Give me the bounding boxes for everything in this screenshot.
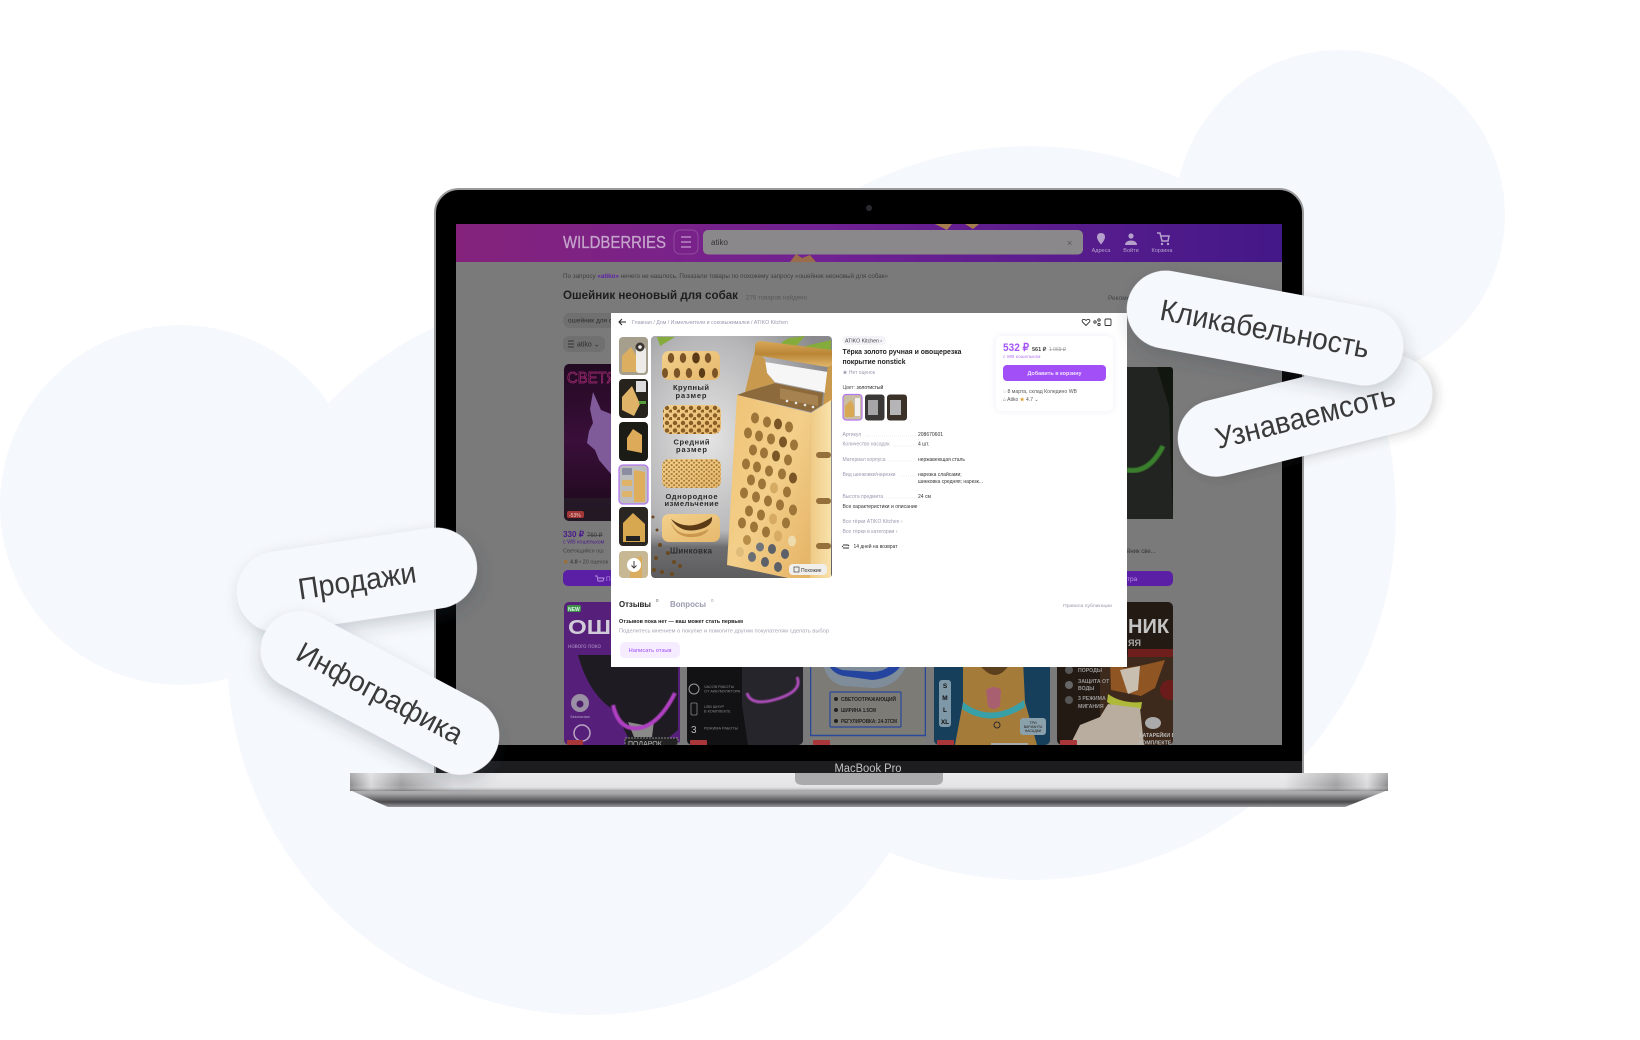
product card row 2: dark collar: 3 [691,725,697,736]
modal panel [611,313,1127,667]
breadcrumb: Главная / Дом / Измельчители и соковыжималки / ATIKO Kitchen [632,320,788,326]
reviews section: Отзывов пока нет — ваш может стать первым [619,619,743,625]
panel: small holes [662,459,721,488]
product title: Тёрка золото ручная и овощерезка [842,347,962,356]
thumbnail: grater on dark [619,422,648,461]
label: medium: размер [676,445,707,454]
reviews section: Правила публикации [1063,603,1112,609]
header icons: Адреса [1092,248,1111,254]
reviews section: Вопросы [670,600,706,609]
grater [727,341,832,578]
product card row 2: corgi: S [943,683,948,690]
product title [842,347,962,366]
product card: black dog with green collar: йник све... [1127,548,1156,555]
label: slicer: Шинковка [670,546,713,556]
product card row 2: dog with yellow collar: 3 РЕЖИМА [1078,696,1106,702]
thumbnail: grater box [619,379,648,418]
product card row 2: blue collar: РЕГУЛИРОВКА: 24-37СМ [841,719,897,725]
pill: Кликабельность: Кликабельность [1157,294,1372,365]
label: large [674,384,708,400]
pill: Инфографика [247,598,513,788]
action icons [1082,319,1111,326]
return policy [842,543,898,550]
header icons [1092,233,1173,254]
brand chip [563,336,605,352]
laptop base [350,773,1388,807]
panel: medium holes [663,405,721,434]
product card row 2: dog with yellow collar: НИК [1128,616,1170,638]
pill: Кликабельность [1120,264,1410,392]
product card: neon dog: ★ 4.8 • 20 оценок [563,560,609,566]
card price: 330 ₽ [563,529,585,539]
product card row 2: dark collar [687,667,803,745]
specification list: нарезка слайсами; [918,471,962,478]
thumbnail: partial, with scroll button [619,551,648,578]
card image: СВЕТЯ [567,370,617,387]
product card row 2: dog with yellow collar: БАТАРЕЙКИ В [1139,731,1176,739]
screen: dimmed marketplace page [456,224,1282,748]
specification list: Вид шинковки/нарезки [842,472,896,478]
thumbnail: white box and cat [619,337,648,375]
label: medium [674,439,709,454]
panel: slicer [662,514,720,542]
product card row 2: corgi: XL [941,719,949,726]
grater front [727,395,811,578]
price box: с WB кошельком [1003,354,1040,360]
specification list: Высота предмета [842,494,883,500]
product card row 2: dark collar: РЕЖИМА РАБОТЫ [704,726,739,730]
product card row 2: dog with yellow collar: МИГАНИЯ [1078,704,1104,710]
product card row 2: dog with yellow collar [1057,602,1180,746]
specification list: шинковка средняя; нарезк... [918,479,983,485]
product card row 2: blue collar: СВЕТООТРАЖАЮЩИЙ [841,695,896,703]
product card row 2: dark collar: В КОМПЛЕКТЕ [704,710,731,714]
specification list: 4 шт. [918,442,929,448]
camera [866,205,872,211]
grater side slots [816,452,831,549]
menu button [674,230,698,254]
price box: 561 ₽ [1032,346,1047,353]
specification list: Все тёрки ATIKO Kitchen › [842,519,903,525]
product card row 2: corgi [934,667,1050,745]
pill: Инфографика: Инфографика [291,637,469,752]
specification list: нержавеющая сталь [918,457,965,463]
product card row 2: purple collar: Безопасная [570,715,590,719]
search field: atiko [711,238,728,247]
specification list: Количество насадок [842,442,890,448]
product card row 2: corgi: ТРИ [1030,721,1037,725]
price box: 1 069 ₽ [1049,347,1067,353]
results heading: Ошейник неоновый для собак [563,288,739,302]
label: uniform [665,494,718,506]
specification list [842,432,983,535]
main product image [651,336,832,578]
grater handle [755,341,832,367]
label: medium: Средний [674,438,710,446]
card image: -53% [569,513,581,519]
product card row 2: purple collar [564,602,680,748]
product card row 2: purple collar: NEW [568,607,580,613]
product card: neon dog: 760 ₽ [587,532,603,539]
thumbnail: selected [619,465,648,504]
product card row 2: corgi: ВАРИАНТА [1024,725,1043,729]
card button [563,570,611,586]
pill: Узнаваемсоть [1170,347,1440,485]
similar button: Похожие [801,568,822,574]
specification list: Материал корпуса [842,457,886,463]
product card: neon dog [563,364,611,586]
specification list: 208670601 [918,432,943,438]
pill: Продажи [231,522,483,638]
lid chin [436,761,1302,774]
reviews section [619,598,1112,658]
product card row 2: corgi: НАСАДКИ [1025,729,1042,733]
logo: WILDBERRIES [563,232,666,252]
leaves [657,336,831,350]
price box [996,336,1113,411]
delivery: ◌ 8 марта, склад Коледино WB [1003,389,1078,395]
product modal [611,313,1127,667]
grater struts [745,350,832,406]
product title: покрытие nonstick [842,357,906,366]
sort link: Рекомендации [1108,295,1153,302]
pill: Узнаваемсоть: Узнаваемсоть [1212,379,1399,456]
product card row 2: purple collar: нового поко [568,644,601,650]
brand chip: atiko ⌄ [577,342,600,348]
pill: Продажи: Продажи [296,556,419,607]
color swatches [843,394,907,420]
seller: ⌂ Atiko ★ 4.7 ⌄ [1003,397,1039,403]
write review button: Написать отзыв [628,648,672,654]
grater side [810,400,831,578]
product card row 2: dog with yellow collar: ЯЯ [1128,638,1141,648]
grater window [765,362,828,395]
rating: ★ Нет оценок [842,370,876,376]
seeds [652,516,682,576]
similar button [789,564,827,575]
product card row 2: dark collar: ОТ АККУМУЛЯТОРА [704,690,741,694]
laptop lid [435,189,1303,775]
specification list: Артикул [842,432,861,438]
product card: black dog with green collar [1127,367,1173,586]
search note: По запросу «atiko» ничего не нашлось. Показали товары по похожему запросу «ошейник неоновый для собак» [563,273,889,280]
card image [564,364,611,521]
thumbnails [619,337,648,578]
specification list: Все тёрки в категории › [842,529,898,535]
product card: neon dog: Светящийся ош [563,548,604,554]
header icons: Войти [1123,247,1139,254]
product card row 2: dog with yellow collar: КОМПЛЕКТЕ [1139,740,1172,746]
write review button [620,642,680,658]
reviews section: 0 [656,598,659,603]
search field [703,230,1083,254]
product card row 2: dark collar: USB ШНУР [704,705,724,709]
filter chip: ошейник для с [568,316,613,324]
label: uniform: измельчение [664,499,718,508]
laptop model label: MacBook Pro [834,763,902,775]
grater holes [736,412,798,572]
brand chip [842,336,886,345]
product card: black dog with green collar: тра [1127,576,1138,583]
add to cart button: Добавить в корзину [1028,370,1082,377]
label: large: размер [676,391,707,400]
specification list: Все характеристики и описание [842,504,918,510]
reviews section: Отзывы [619,600,651,609]
product card: neon dog: с WB кошельком [563,540,605,546]
specification list: 24 см [918,494,931,500]
laptop [350,189,1388,807]
product card row 2: purple collar: ОШ [568,617,611,639]
label: large: Крупный [673,383,709,392]
filter chip [563,313,611,328]
header icons: Корзина [1152,248,1173,254]
grater interior [737,383,823,412]
product card row 2: dog with yellow collar: ВОДЫ [1078,686,1094,692]
brand chip: ATIKO Kitchen › [845,338,882,344]
product card row 2: purple collar: ПОДАРОК [628,741,663,748]
product card row 2: dog with yellow collar: ЗАЩИТА ОТ [1078,679,1110,685]
product card row 2: blue collar: ШИРИНА 1.5СМ [841,708,876,714]
product card row 2: corgi: L [943,707,947,714]
product card row 2: blue collar [810,667,926,745]
result count: 276 товаров найдено [746,294,807,302]
price: 532 ₽ [1003,342,1029,354]
color label: Цвет: золотистый [842,384,884,391]
product card row 2: dog with yellow collar: ПОРОДЫ [1078,668,1102,674]
reviews section: 0 [711,598,714,603]
return policy: 14 дней на возврат [854,543,898,550]
product card row 2: dark collar: ЧАСОВ РАБОТЫ [704,685,735,689]
reviews section: Поделитесь мнением о покупке и помогите другим покупателям сделать выбор [619,628,829,634]
label: uniform: Однородное [666,492,718,501]
thumbnail: grater with label [619,507,648,546]
product card row 2: corgi: M [942,695,948,702]
site header [456,224,1282,262]
panel: large holes [662,351,720,380]
card button: П [606,576,611,583]
page background [456,224,1282,745]
search field: × [1067,238,1072,248]
